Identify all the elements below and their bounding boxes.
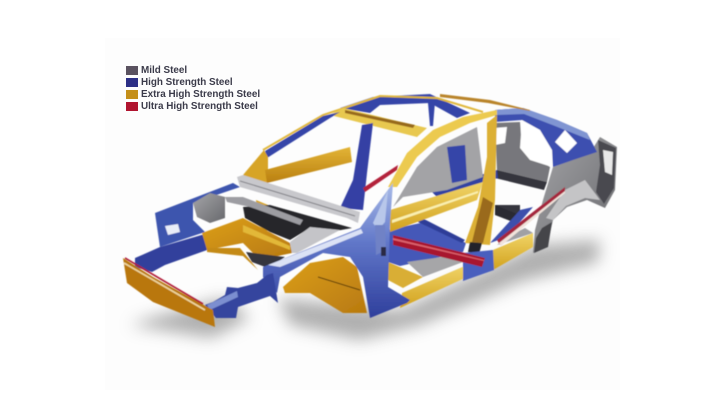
far strut tower, mild steel [193,193,225,223]
rear quarter panel, mild steel [533,137,617,253]
rear window cross member [428,102,435,126]
far A-pillar yellow foot [243,150,268,187]
legend row: high strength steel: High Strength Steel [141,77,233,88]
legend row: ultra high strength steel: Ultra High Strength Steel [141,101,258,112]
car body shell [123,94,617,327]
rear floor blue brace and red bar [490,187,565,246]
red side bar, ultra high strength [393,235,485,267]
roof outer yellow edge [263,96,483,150]
ground shadow [130,240,600,340]
sill node blue [463,250,494,281]
near crash rail, high strength [205,273,278,318]
far lower pillar yellow [256,200,268,232]
near B-pillar, extra high strength [465,115,497,254]
far fender rail, high strength [155,183,240,247]
front sill, extra high strength [400,265,467,308]
near firewall and A-pillar, high strength [263,183,410,318]
main roof arc, extra high strength [388,110,497,187]
rear roof, high strength steel [495,108,597,167]
header dark stripe [345,110,415,128]
near strut tower, mild steel [290,227,340,253]
near wheel arch, extra high strength [283,257,367,313]
engine cross strut, mild steel [225,197,303,225]
far A-pillar blue band [265,112,340,158]
front bumper, extra high strength with ultra high strength edge [123,258,215,327]
arch crease [318,277,360,290]
cowl, mild steel [237,175,360,223]
engine bay, dark [243,205,352,240]
rear far side inner structure [430,120,552,220]
far B-pillar, high strength [340,123,373,210]
rear sill, extra high strength [493,233,533,270]
door beam, extra high strength [390,182,483,232]
legend [126,65,260,112]
floor structure [388,205,520,288]
roof rail far side, orange [440,94,530,111]
dash cross bar, extra high strength [265,147,352,183]
front frame, extra high strength [202,218,292,270]
interior far side panel [393,127,483,207]
far red bar [363,165,398,192]
legend row: mild steel: Mild Steel [141,65,187,76]
interior blue box [447,145,467,183]
far crash rail, high strength [135,234,207,272]
legend row: extra high strength steel: Extra High Strength Steel [141,89,260,100]
front header yellow [330,108,427,137]
roof frame, high strength steel [340,94,470,118]
